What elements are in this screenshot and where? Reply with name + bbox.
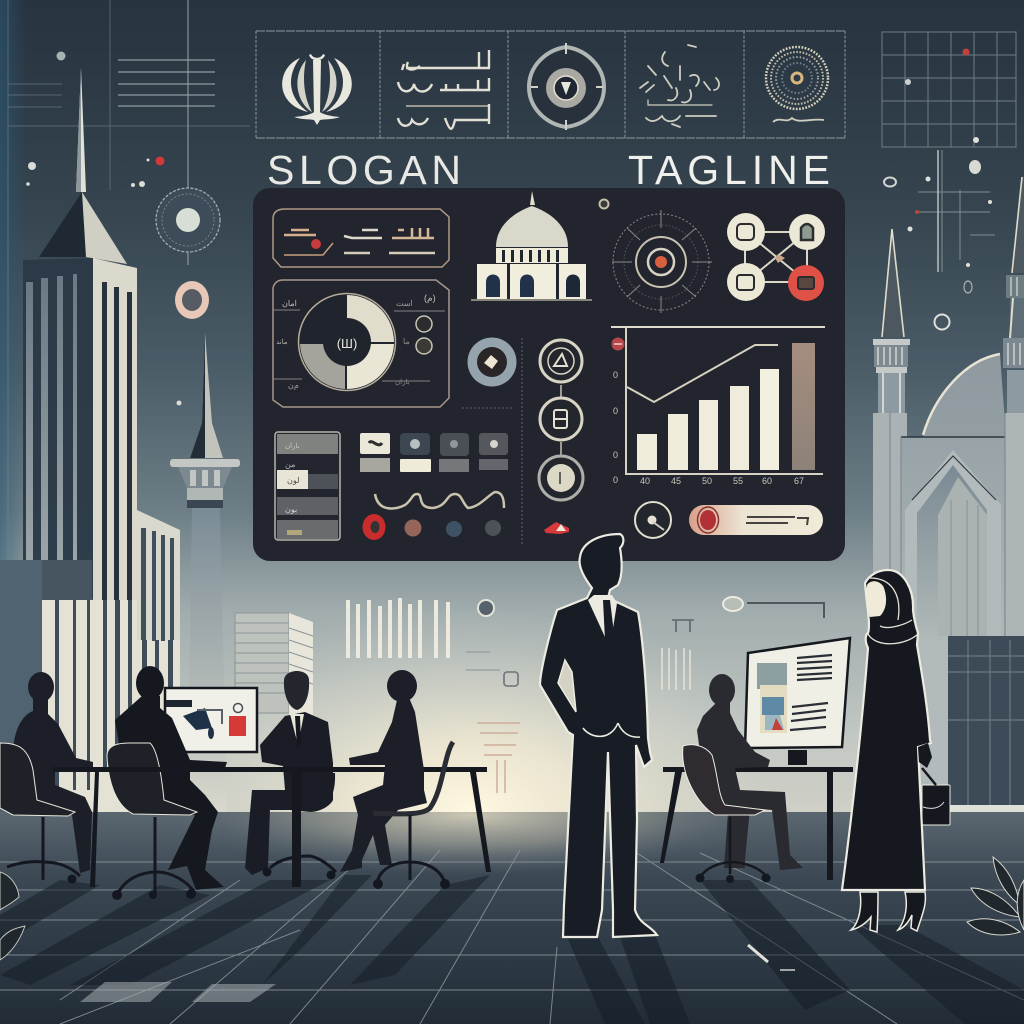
card: donut chart: ﻣﺎ <box>403 337 410 346</box>
wave connector <box>375 492 504 508</box>
decorative details <box>26 0 1016 793</box>
dark lower building <box>948 636 1024 806</box>
small ring marker <box>600 200 608 208</box>
face <box>866 581 886 617</box>
card: list menu: ﻟﻮﻥ <box>287 476 299 485</box>
left lower building <box>0 510 180 812</box>
monitor right <box>745 638 850 765</box>
status dots <box>362 514 501 540</box>
shirt and tie <box>588 595 617 648</box>
search icon <box>635 502 671 538</box>
chair 1 <box>0 743 80 884</box>
bar chart <box>611 327 825 486</box>
bar chart: 0 <box>613 450 618 460</box>
slider pill <box>689 505 823 535</box>
icon: script ornament <box>640 45 719 127</box>
card: donut chart: ﺑﺎﺭﺍﻥ <box>395 378 410 386</box>
card: donut chart: ﻡﻥ <box>288 381 299 390</box>
node chain <box>539 340 583 500</box>
person seated 4 <box>340 670 427 872</box>
card: donut chart: (ﻡ) <box>424 293 436 304</box>
card: list menu: ﺑﺎﺭﺍﻥ <box>285 442 300 450</box>
bar chart: 60 <box>762 476 772 486</box>
monitor left <box>165 688 257 752</box>
tagline title: TAGLINE <box>628 147 830 193</box>
desk right <box>660 767 853 880</box>
icon: emblem <box>282 54 352 125</box>
bar motif <box>346 598 450 658</box>
bar chart: 55 <box>733 476 743 486</box>
group at table <box>0 666 491 900</box>
bar chart: 45 <box>671 476 681 486</box>
bar chart: 0 <box>613 475 618 485</box>
plant right <box>967 857 1024 935</box>
dotted divider <box>462 338 522 545</box>
standing woman <box>842 570 950 932</box>
person seated 3 <box>245 671 336 880</box>
person seated 2 <box>115 666 227 890</box>
small rings and notes <box>466 597 824 793</box>
slogan title: SLOGAN <box>267 147 461 193</box>
bar chart: 67 <box>794 476 804 486</box>
card: donut chart <box>273 280 449 407</box>
card: list menu: ﺑﻮﻥ <box>285 505 297 514</box>
hand <box>918 743 932 768</box>
person at desk <box>697 674 803 870</box>
person seated 1 <box>13 672 93 873</box>
left skyline <box>0 68 313 812</box>
floor <box>0 812 1024 1024</box>
left tower <box>170 333 240 812</box>
chair 2 <box>107 743 197 900</box>
circle emblem left <box>156 188 220 252</box>
top right grid <box>882 32 1016 147</box>
legs and heels <box>851 892 925 932</box>
icon: calligraphy block <box>398 50 490 129</box>
small red tag <box>544 522 569 534</box>
card: donut chart: ﺍﻣﺎﻥ <box>282 299 297 308</box>
card: donut chart: (Ш) <box>337 336 357 351</box>
scarf folds <box>868 578 918 644</box>
floor shadows <box>0 875 1024 1024</box>
floor papers <box>80 982 276 1002</box>
dome icon <box>471 191 592 300</box>
ring icon <box>468 338 516 386</box>
bar chart: 0 <box>613 406 618 416</box>
handbag <box>922 768 950 825</box>
desk and worker <box>660 638 853 883</box>
card: list menu: ﻣﻦ <box>285 460 295 469</box>
card: donut chart: ﺍﺳﺖ <box>396 299 413 308</box>
icon: dotted sphere <box>766 47 828 122</box>
top left lines <box>118 60 215 106</box>
chair right <box>683 745 770 883</box>
minaret left <box>873 229 910 413</box>
ring left <box>175 281 209 319</box>
top icon strip <box>256 31 845 138</box>
right skyline <box>873 177 1024 818</box>
bar chart: 40 <box>640 476 650 486</box>
arm gap <box>558 660 576 712</box>
radar dial <box>612 210 712 313</box>
standing man <box>540 534 657 937</box>
minaret right <box>1003 177 1024 413</box>
bar chart: 0 <box>613 370 618 380</box>
mid building <box>235 613 313 715</box>
dashboard panel <box>253 188 845 561</box>
mosque building <box>873 354 1024 818</box>
button row <box>360 433 508 472</box>
bar chart: 50 <box>702 476 712 486</box>
left skyscraper <box>0 68 137 812</box>
plant left <box>0 872 25 960</box>
network diagram <box>727 213 825 301</box>
card: list menu <box>275 432 340 540</box>
icon: ring shield <box>529 43 604 130</box>
chair 4 <box>373 742 453 889</box>
card: donut chart: ﻣﺎﻧﺪ <box>276 338 288 346</box>
table left <box>53 767 491 887</box>
card: text header <box>273 209 449 267</box>
